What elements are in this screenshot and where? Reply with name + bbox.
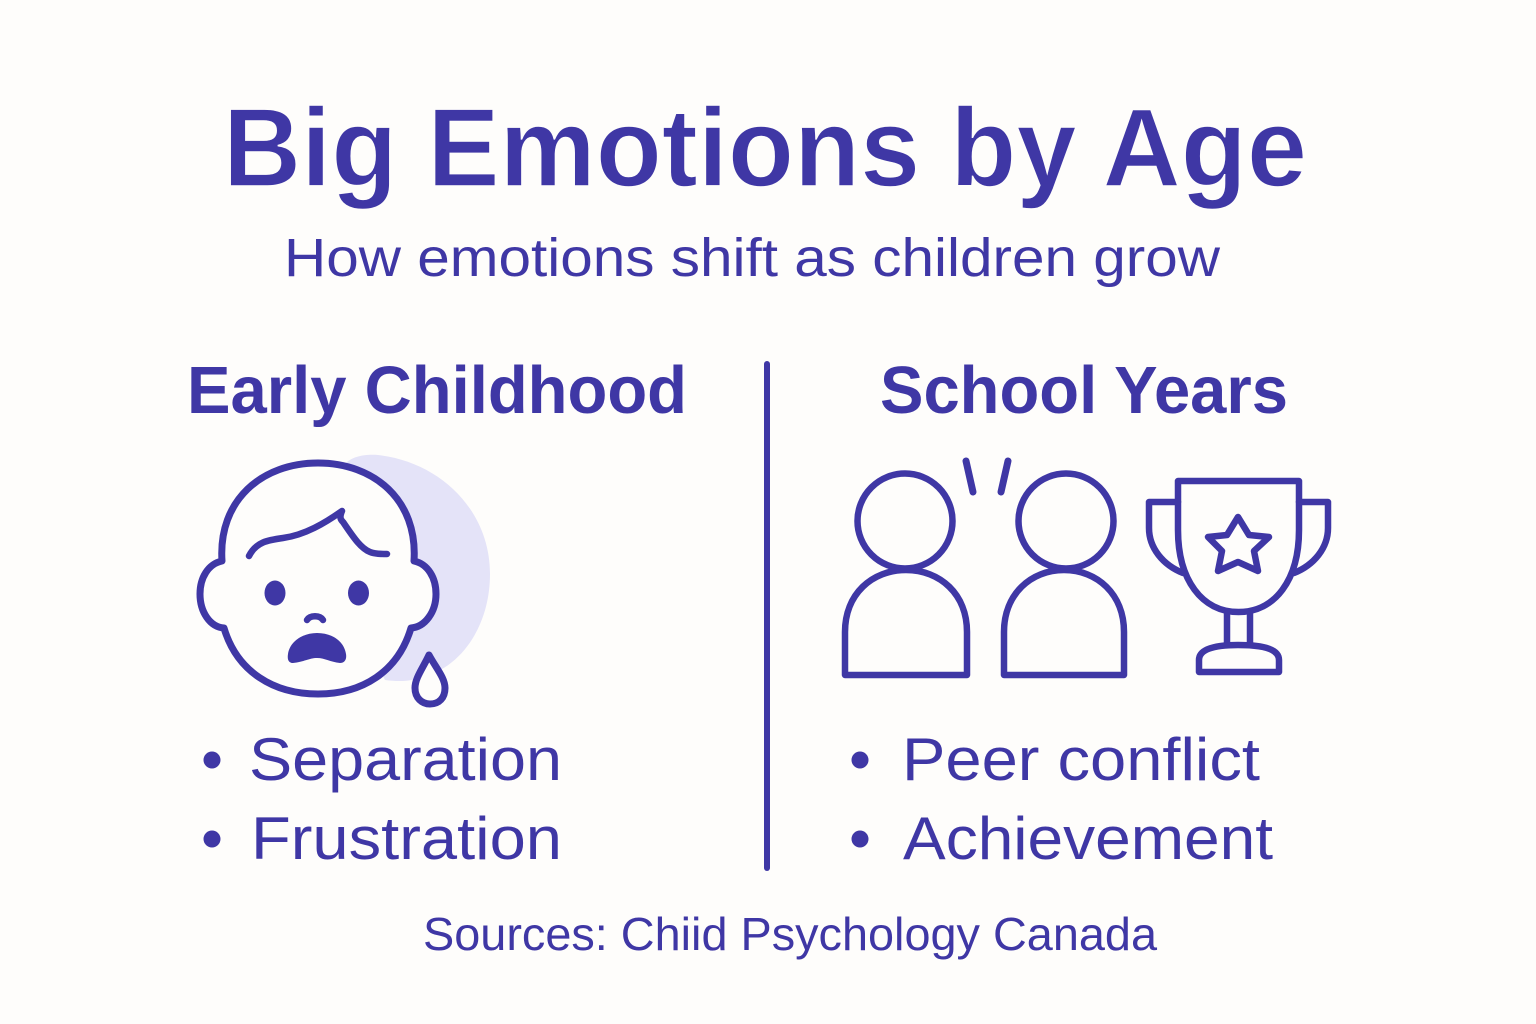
right peer head [1018, 474, 1114, 568]
center divider [764, 361, 770, 871]
eyes [264, 580, 286, 606]
stem [1227, 614, 1250, 643]
list: school years [852, 726, 1273, 872]
left handle [1149, 502, 1183, 573]
nose [307, 616, 323, 620]
title: Big Emotions by Age [223, 86, 1307, 210]
face outline [200, 463, 436, 694]
bullet [204, 830, 220, 848]
source note: Sources: Chiid Psychology Canada [423, 908, 1157, 960]
icon: crying child face [200, 455, 490, 704]
bullet [852, 752, 868, 768]
right peer body [1004, 570, 1124, 675]
icon: two peers in conflict [845, 461, 1124, 675]
left peer head [858, 474, 952, 568]
item: separation: Separation [249, 726, 562, 793]
subtitle: How emotions shift as children grow [284, 228, 1221, 288]
icon: trophy [1149, 481, 1328, 672]
cup [1178, 481, 1299, 612]
item: frustration: Frustration [251, 805, 562, 872]
bullet [852, 830, 868, 848]
right handle [1294, 502, 1328, 573]
item: achievement: Achievement [903, 805, 1273, 872]
tear drop [415, 655, 445, 704]
open mouth [288, 633, 346, 663]
item: peer conflict: Peer conflict [902, 726, 1260, 793]
conflict marks [966, 461, 1008, 492]
lavender blob [345, 455, 490, 681]
hair curl [249, 511, 387, 556]
heading: early childhood: Early Childhood [187, 353, 687, 428]
star [1208, 517, 1269, 571]
base [1199, 645, 1279, 672]
bullet [204, 752, 220, 768]
left peer body [845, 570, 967, 675]
heading: school years: School Years [880, 353, 1288, 428]
list: early childhood [204, 726, 562, 872]
